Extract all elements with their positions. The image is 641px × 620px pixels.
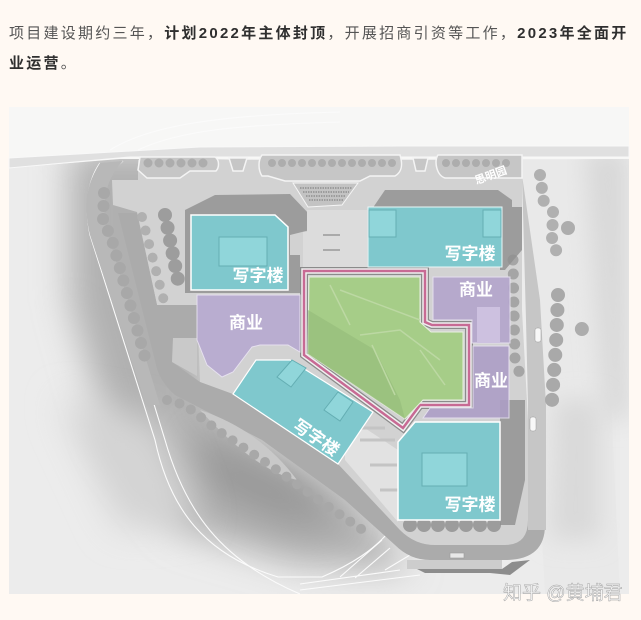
map background: [9, 159, 629, 594]
commercial block lower right: [423, 346, 509, 418]
label: 写字楼: [444, 244, 496, 264]
intro text: [9, 25, 629, 72]
label: 写字楼: [232, 266, 284, 286]
courtyard paths: [330, 285, 445, 395]
planters: [138, 155, 522, 181]
intro text: 业运营。: [9, 55, 78, 72]
building shadows: [185, 190, 525, 525]
atrium right: [483, 210, 501, 237]
lower road shadow: [417, 560, 530, 575]
green courtyard: [308, 277, 463, 419]
commercial block left: [197, 295, 300, 377]
site name label: 思明园: [473, 164, 509, 187]
office upper right: [368, 207, 502, 267]
label: 商业: [474, 372, 508, 390]
label: 写字楼: [290, 415, 343, 460]
top street band: [9, 146, 629, 168]
watermark: 知乎 @黄埔君: [503, 582, 623, 604]
office lower right: [398, 422, 500, 520]
right grey road: [522, 175, 546, 530]
courtyard shade: [308, 310, 405, 419]
road sign: [450, 553, 464, 558]
lower road apron: [407, 560, 502, 569]
label: 商业: [229, 314, 263, 332]
canopy stripes: [300, 188, 352, 200]
atrium: [219, 237, 267, 266]
atrium: [422, 453, 467, 486]
label: 写字楼: [444, 494, 496, 514]
central plaza gap: [303, 210, 367, 268]
label: 商业: [459, 280, 493, 300]
left grey road: [86, 161, 160, 405]
inner light block: [477, 307, 500, 343]
paving stripes: [352, 428, 398, 490]
cars: [530, 328, 541, 431]
road island: [172, 338, 197, 376]
planter tree dots: [148, 158, 515, 168]
entrance canopy: [293, 183, 358, 207]
intro text: 项目建设期约三年，计划2022年主体封顶，开展招商引资等工作，2023年全面开: [9, 25, 629, 42]
site plan map: [9, 146, 629, 602]
main grey access road: [118, 213, 545, 560]
lower lens ground: [200, 410, 297, 480]
office upper left: [191, 215, 288, 290]
outer white curved roads: [87, 112, 420, 594]
tree rows: [103, 175, 582, 535]
plaza ground: [112, 160, 528, 545]
commercial block upper right: [433, 277, 510, 343]
gap steps: [323, 235, 340, 250]
atrium two: [324, 392, 353, 421]
office lower centre: [233, 360, 373, 464]
atrium left: [369, 210, 396, 237]
left lower paving: [345, 415, 398, 522]
atrium one: [277, 360, 306, 387]
pink corridor ring: [304, 271, 469, 428]
